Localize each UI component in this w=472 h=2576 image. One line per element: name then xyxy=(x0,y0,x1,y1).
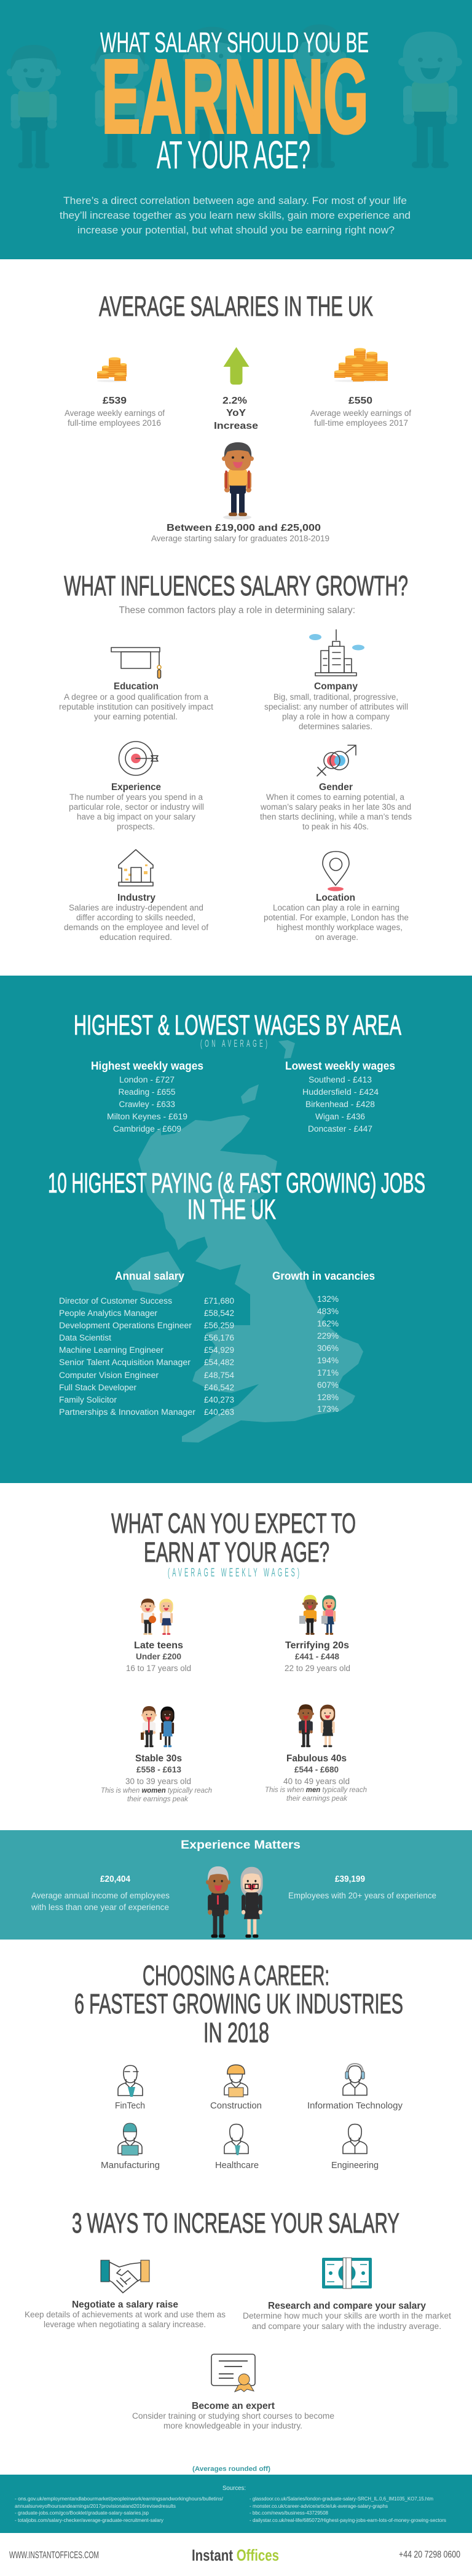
icon: banknotes xyxy=(322,2258,372,2288)
table: annual salary: Partnerships & Innovation Manager xyxy=(59,1407,196,1417)
block: research xyxy=(243,2301,451,2331)
list: lowest weekly wages: Southend - £413 xyxy=(309,1075,372,1084)
block: research: and compare your salary with the industry average. xyxy=(252,2322,441,2331)
block: become an expert: more knowledgeable in your industry. xyxy=(163,2421,302,2430)
panel: sources xyxy=(0,2475,472,2533)
block: education xyxy=(59,681,213,721)
block: become an expert xyxy=(132,2401,334,2430)
table: growth in vacancies xyxy=(272,1270,375,1414)
block: fabulous 40s: 40 to 49 years old xyxy=(283,1777,350,1786)
list: lowest weekly wages xyxy=(285,1060,395,1133)
block: experience: particular role, sector or industry will xyxy=(69,802,204,812)
map of the UK xyxy=(124,1040,363,1443)
heading: highest paying jobs xyxy=(48,1167,425,1225)
block: location: potential. For example, London has the xyxy=(264,913,409,922)
block: experience: have a big impact on your salary xyxy=(77,812,195,821)
stat: 20+ years: Employees with 20+ years of experience xyxy=(288,1891,436,1900)
list: highest weekly wages: Reading - £655 xyxy=(118,1087,176,1097)
source list right xyxy=(250,2496,446,2523)
icon: industry building xyxy=(119,850,153,886)
block: gender: When it comes to earning potential, a xyxy=(266,793,404,802)
block: education: reputable institution can positively impact xyxy=(59,702,213,711)
block: experience: The number of years you spend in a xyxy=(69,793,203,802)
block: late teens xyxy=(126,1640,191,1673)
label: information technology: Information Technology xyxy=(307,2100,403,2111)
heading: CHOOSING A CAREER: xyxy=(143,1960,329,1991)
table: annual salary: Development Operations Engineer xyxy=(59,1321,192,1330)
icon: construction xyxy=(224,2065,248,2097)
table: growth in vacancies: 306% xyxy=(317,1344,339,1353)
stat: year on year increase: 2.2% xyxy=(222,396,247,406)
label: fintech: FinTech xyxy=(115,2100,145,2111)
block: stable 30s: This is when women typically reach xyxy=(101,1787,212,1795)
footer xyxy=(9,2546,460,2564)
panel: expected earnings by age xyxy=(101,1508,367,1803)
label: healthcare: Healthcare xyxy=(215,2160,259,2171)
panel: experience matters xyxy=(0,1830,472,1940)
source list left xyxy=(15,2496,224,2523)
stat: 2017 earnings: £550 xyxy=(348,396,372,406)
block: gender xyxy=(260,782,412,831)
list: highest weekly wages: Highest weekly wages xyxy=(91,1060,203,1072)
table: growth in vacancies: 173% xyxy=(317,1404,339,1414)
block: location: Location xyxy=(316,893,355,903)
block: experience xyxy=(69,782,204,831)
panel: average salaries xyxy=(65,291,411,543)
source list right: - bbc.com/news/business-43729508 xyxy=(250,2510,328,2516)
heading: EARN AT YOUR AGE? xyxy=(144,1537,329,1568)
table: annual salary: £48,754 xyxy=(204,1371,234,1380)
table: annual salary: People Analytics Manager xyxy=(59,1309,158,1318)
stat: graduate starting salary: Between £19,000 and £25,000 xyxy=(167,523,321,533)
table: annual salary: £46,542 xyxy=(204,1383,234,1392)
table: growth in vacancies: 171% xyxy=(317,1368,339,1377)
table: annual salary xyxy=(59,1270,234,1417)
illustration: forties xyxy=(297,1704,335,1747)
block: terrifying 20s: Terrifying 20s xyxy=(285,1640,349,1651)
block: gender: Gender xyxy=(319,782,353,793)
table: annual salary: £40,263 xyxy=(204,1407,234,1417)
block: experience: prospects. xyxy=(117,822,155,831)
stat: 2016 earnings xyxy=(65,396,165,428)
block: stable 30s: 30 to 39 years old xyxy=(125,1777,191,1786)
block: negotiate: Keep details of achievements at work and use them as xyxy=(25,2310,226,2319)
panel: fastest growing industries xyxy=(74,1960,403,2171)
stat: 2016 earnings: Average weekly earnings of xyxy=(65,409,165,418)
list: highest weekly wages: London - £727 xyxy=(119,1075,175,1084)
heading xyxy=(74,1960,403,2048)
table: annual salary: £56,176 xyxy=(204,1333,234,1342)
intro paragraph: There’s a direct correlation between age and salary. For most of your life xyxy=(63,195,407,206)
table: annual salary: Full Stack Developer xyxy=(59,1383,136,1392)
block: late teens: 16 to 17 years old xyxy=(126,1664,191,1673)
block: stable 30s: their earnings peak xyxy=(127,1796,189,1803)
block: negotiate: leverage when negotiating a salary increase. xyxy=(44,2320,206,2329)
heading: sources: Sources: xyxy=(222,2485,246,2492)
table: annual salary: £58,542 xyxy=(204,1309,234,1318)
panel: what influences salary growth xyxy=(59,570,412,942)
block: industry xyxy=(64,893,208,942)
title line 3: AT YOUR AGE? xyxy=(157,133,310,177)
illustration: senior man and woman xyxy=(206,1866,263,1938)
icon: engineering xyxy=(343,2124,367,2153)
table: growth in vacancies: 194% xyxy=(317,1356,339,1365)
label: construction: Construction xyxy=(210,2100,262,2111)
stat: 20+ years: £39,199 xyxy=(335,1874,365,1884)
block: company: Big, small, traditional, progressive, xyxy=(273,692,398,702)
stat: 20+ years xyxy=(288,1874,436,1900)
block: fabulous 40s xyxy=(265,1753,367,1803)
icon: small coin stacks xyxy=(97,358,128,382)
block: late teens: Late teens xyxy=(134,1640,183,1651)
block: education: your earning potential. xyxy=(94,712,178,721)
block: location: highest monthly workplace wages, xyxy=(277,923,403,932)
block: education: A degree or a good qualification from a xyxy=(64,692,208,702)
source list left: - ons.gov.uk/employmentandlabourmarket/peopleinwork/earningsandworkinghours/bulletins/ xyxy=(15,2496,224,2502)
panel: ways to increase salary xyxy=(25,2207,451,2473)
block: fabulous 40s: Fabulous 40s xyxy=(286,1753,347,1764)
table: annual salary: £56,259 xyxy=(204,1321,234,1330)
table: growth in vacancies: Growth in vacancies xyxy=(272,1270,375,1282)
website: WWW.INSTANTOFFICES.COM xyxy=(9,2550,99,2561)
table: annual salary: Machine Learning Engineer xyxy=(59,1345,164,1355)
block: industry: differ according to skills needed, xyxy=(76,913,195,922)
block: stable 30s: Stable 30s xyxy=(135,1753,182,1764)
list: lowest weekly wages: Huddersfield - £424 xyxy=(302,1087,379,1097)
table: annual salary: £54,929 xyxy=(204,1345,234,1355)
icon: information technology xyxy=(343,2064,367,2095)
block: fabulous 40s: their earnings peak xyxy=(286,1795,348,1803)
block: company xyxy=(264,681,408,731)
block: experience: Experience xyxy=(111,782,161,793)
stat: graduate starting salary xyxy=(151,523,329,543)
block: fabulous 40s: This is when men typically reach xyxy=(265,1787,367,1794)
intro paragraph: they’ll increase together as you learn new skills, gain more experience and xyxy=(60,209,411,221)
heading: IN 2018 xyxy=(203,2017,269,2048)
stat: year on year increase: Increase xyxy=(214,421,258,431)
table: annual salary: Family Solicitor xyxy=(59,1395,117,1404)
block: industry: education required. xyxy=(100,933,172,942)
table: annual salary: £71,680 xyxy=(204,1296,234,1306)
heading xyxy=(111,1508,356,1568)
stat: year on year increase: YoY xyxy=(226,408,246,418)
block: negotiate: Negotiate a salary raise xyxy=(72,2300,178,2310)
stat: 2016 earnings: £539 xyxy=(103,396,127,406)
note: averages rounded off: (Averages rounded off) xyxy=(192,2465,270,2473)
table: annual salary: Computer Vision Engineer xyxy=(59,1371,159,1380)
block: stable 30s xyxy=(101,1753,212,1803)
stat: 2017 earnings xyxy=(310,396,411,428)
panel: wages and jobs xyxy=(0,976,472,1483)
stat: graduate starting salary: Average starting salary for graduates 2018-2019 xyxy=(151,534,329,543)
block: terrifying 20s: 22 to 29 years old xyxy=(285,1664,350,1673)
icon: large coin stacks xyxy=(334,348,388,382)
background characters xyxy=(7,25,462,168)
block: company: specialist: any number of attributes will xyxy=(264,702,408,711)
icon: certificate xyxy=(211,2354,255,2392)
intro paragraph xyxy=(60,195,411,236)
subheading: on average: (ON AVERAGE) xyxy=(200,1038,267,1049)
block: negotiate xyxy=(25,2300,226,2329)
table: growth in vacancies: 229% xyxy=(317,1331,339,1341)
source list left: - totaljobs.com/salary-checker/average-graduate-recruitment-salary xyxy=(15,2517,164,2523)
block: education: Education xyxy=(114,681,159,692)
block: late teens: Under £200 xyxy=(136,1651,181,1661)
stat: under one year: £20,404 xyxy=(100,1874,131,1884)
icon: target xyxy=(119,742,158,775)
illustration: twenties xyxy=(299,1595,336,1635)
source list left: annualsurveyofhoursandearnings/2017provisionaland2016revisedresults xyxy=(15,2503,176,2509)
block: stable 30s: £558 - £613 xyxy=(136,1764,181,1774)
source list right: - monster.co.uk/career-advice/article/uk-average-salary-graphs xyxy=(250,2503,388,2509)
block: industry: demands on the employee and level of xyxy=(64,923,208,932)
label: manufacturing: Manufacturing xyxy=(101,2160,160,2171)
source list left: - graduate-jobs.com/gco/Booklet/graduate-salary-salaries.jsp xyxy=(15,2510,149,2516)
heading: Experience Matters xyxy=(181,1839,301,1852)
icon: mortarboard xyxy=(111,648,161,678)
list: highest weekly wages: Crawley - £633 xyxy=(119,1100,175,1109)
block: industry: Salaries are industry-dependent and xyxy=(69,903,203,912)
block: location: Location can play a role in earning xyxy=(273,903,399,912)
icon: location pin xyxy=(323,851,349,891)
list: lowest weekly wages: Doncaster - £447 xyxy=(308,1124,372,1133)
stat: year on year increase xyxy=(214,396,258,431)
table: growth in vacancies: 607% xyxy=(317,1380,339,1390)
logo: Instant Offices xyxy=(192,2546,279,2564)
block: gender: woman’s salary peaks in her late 30s and xyxy=(260,802,411,812)
stat: under one year: with less than one year of experience xyxy=(31,1903,169,1912)
icon: company buildings xyxy=(309,630,364,676)
source list right: - glassdoor.co.uk/Salaries/london-graduate-salary-SRCH_IL.0,6_IM1035_KO7,15.htm xyxy=(250,2496,433,2502)
icon: green up arrow xyxy=(224,347,250,385)
block: become an expert: Become an expert xyxy=(192,2401,275,2411)
list: lowest weekly wages: Birkenhead - £428 xyxy=(305,1100,375,1109)
panel: header xyxy=(0,0,472,259)
subheading: (AVERAGE WEEKLY WAGES) xyxy=(168,1567,299,1580)
table: growth in vacancies: 132% xyxy=(317,1294,339,1304)
table: annual salary: Annual salary xyxy=(115,1270,184,1282)
table: growth in vacancies: 162% xyxy=(317,1319,339,1328)
table: annual salary: Data Scientist xyxy=(59,1333,111,1342)
source list right: - dailystar.co.uk/real-life/685072/Highest-paying-jobs-earn-lots-of-money-growing-sectors xyxy=(250,2517,446,2523)
label: engineering: Engineering xyxy=(331,2160,379,2171)
block: gender: then starts declining, while a man’s tends xyxy=(260,812,412,821)
icon: healthcare xyxy=(224,2124,248,2155)
block: terrifying 20s xyxy=(285,1640,350,1673)
stat: under one year xyxy=(31,1874,170,1912)
table: annual salary: £54,482 xyxy=(204,1358,234,1367)
block: location xyxy=(264,893,409,942)
icon: manufacturing xyxy=(118,2123,142,2155)
intro paragraph: increase your potential, but what should you be earning right now? xyxy=(77,224,395,236)
block: fabulous 40s: £544 - £680 xyxy=(294,1764,339,1774)
list: lowest weekly wages: Lowest weekly wages xyxy=(285,1060,395,1072)
block: terrifying 20s: £441 - £448 xyxy=(295,1651,339,1661)
block: research: Determine how much your skills are worth in the market xyxy=(243,2311,451,2320)
heading: highest paying jobs: IN THE UK xyxy=(187,1194,276,1225)
block: become an expert: Consider training or studying short courses to become xyxy=(132,2411,334,2421)
icon: handshake xyxy=(101,2260,149,2293)
table: growth in vacancies: 128% xyxy=(317,1393,339,1402)
list: highest weekly wages xyxy=(91,1060,203,1133)
table: annual salary: £40,273 xyxy=(204,1395,234,1404)
stat: 2017 earnings: full-time employees 2017 xyxy=(314,418,408,428)
illustration: graduate xyxy=(222,442,254,520)
block: location: on average. xyxy=(315,933,358,942)
block: company: determines salaries. xyxy=(299,722,372,731)
block: gender: to peak in his 40s. xyxy=(302,822,369,831)
block: company: play a role in how a company xyxy=(282,712,390,721)
icon: gender symbols xyxy=(317,745,356,776)
table: annual salary: Senior Talent Acquisition Manager xyxy=(59,1358,191,1367)
block: research: Research and compare your salary xyxy=(268,2301,426,2311)
table: growth in vacancies: 483% xyxy=(317,1307,339,1316)
list: highest weekly wages: Milton Keynes - £619 xyxy=(107,1112,187,1121)
icon: fintech xyxy=(118,2065,143,2097)
stat: 2017 earnings: Average weekly earnings of xyxy=(310,409,411,418)
illustration: late teens xyxy=(140,1599,173,1635)
subheading: These common factors play a role in determining salary: xyxy=(119,605,355,616)
stat: 2016 earnings: full-time employees 2016 xyxy=(68,418,161,428)
table: annual salary: Director of Customer Success xyxy=(59,1296,172,1306)
illustration: thirties xyxy=(141,1706,175,1747)
list: lowest weekly wages: Wigan - £436 xyxy=(315,1112,365,1121)
block: company: Company xyxy=(314,681,358,692)
block: industry: Industry xyxy=(117,893,155,903)
list: highest weekly wages: Cambridge - £609 xyxy=(113,1124,181,1133)
stat: under one year: Average annual income of employees xyxy=(31,1891,170,1900)
